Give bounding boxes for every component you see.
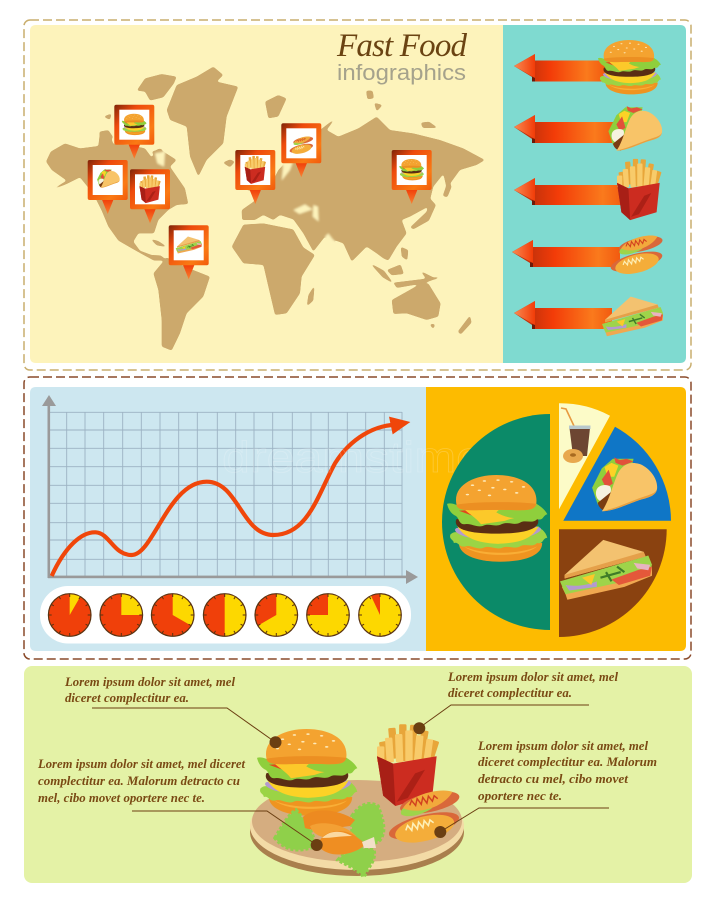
clock 4 — [203, 594, 246, 636]
map pin: sandwich — [169, 225, 209, 279]
arrow: sandwich — [514, 301, 612, 329]
watermark: dreamstime — [222, 433, 484, 482]
pie slice: drink and donut — [559, 403, 610, 509]
trend line with arrow — [52, 417, 410, 576]
pie slice: sandwich — [559, 529, 667, 637]
food: sandwich — [602, 297, 663, 336]
callout: right: detracto cu mel, cibo movet — [478, 772, 629, 786]
clock 3 — [151, 594, 194, 636]
arrow: burger — [514, 54, 605, 82]
callout: left: complectitur ea. Malorum detracto cu — [38, 774, 240, 788]
title: Fast Food — [336, 28, 468, 64]
clock 5 — [255, 594, 298, 636]
food: hot dog — [609, 232, 665, 279]
map pin: burger — [392, 150, 432, 204]
pie chart — [442, 403, 671, 637]
food: hot dog on plate — [386, 786, 463, 849]
food: lettuce and chicken — [275, 804, 384, 877]
food: taco — [608, 106, 662, 151]
clock 2 — [100, 594, 143, 636]
map pin: fries — [235, 150, 275, 204]
clock 1 — [48, 594, 91, 636]
panel: line chart background — [30, 387, 426, 651]
world map — [46, 67, 485, 351]
map water cut-outs — [155, 152, 338, 247]
callout: right: oportere nec te. — [478, 789, 562, 803]
line chart — [42, 395, 418, 584]
map pin: fries — [130, 169, 170, 223]
panel: pie chart background — [426, 387, 686, 651]
callout: left: Lorem ipsum dolor sit amet, mel diceret — [37, 757, 246, 771]
clock strip — [40, 586, 411, 644]
map pin: taco — [88, 160, 128, 214]
clock 6 — [307, 594, 349, 636]
callout: right: Lorem ipsum dolor sit amet, mel — [477, 739, 649, 753]
callout: top left — [64, 675, 282, 748]
chart axes — [42, 395, 418, 584]
panel: arrow legend background — [503, 25, 686, 363]
callout: top right — [413, 670, 619, 734]
plate — [250, 780, 464, 876]
arrow: fries — [514, 178, 625, 205]
callout: right — [434, 739, 657, 838]
pie slice: taco — [563, 427, 671, 521]
dashed frame: middle section — [24, 377, 691, 659]
arrow: taco — [514, 115, 615, 143]
clock 7 — [359, 594, 401, 636]
food: fries on plate — [377, 724, 439, 806]
food: burger — [598, 40, 661, 94]
map pin: burger — [114, 105, 154, 159]
dashed frame: top section — [24, 20, 691, 370]
pie slice: burger — [442, 414, 550, 630]
arrow: hot dog — [512, 240, 620, 267]
callout: top left: Lorem ipsum dolor sit amet, mel — [64, 675, 236, 689]
map pin: hotdog — [281, 123, 321, 177]
callout: right: diceret complectitur ea. Malorum — [478, 755, 657, 769]
callout: top right: Lorem ipsum dolor sit amet, mel — [447, 670, 619, 684]
panel: bottom food plate section — [24, 666, 692, 883]
callout: left: mel, cibo movet oportere nec te. — [38, 791, 205, 805]
title — [336, 28, 468, 85]
food: burger on plate — [257, 729, 357, 816]
callout: top left: diceret complectitur ea. — [65, 691, 189, 705]
callout: left — [37, 757, 323, 851]
callout: top right: diceret complectitur ea. — [448, 686, 572, 700]
panel: world map background — [30, 25, 503, 363]
title: infographics — [337, 60, 466, 85]
food: fries — [617, 159, 662, 220]
